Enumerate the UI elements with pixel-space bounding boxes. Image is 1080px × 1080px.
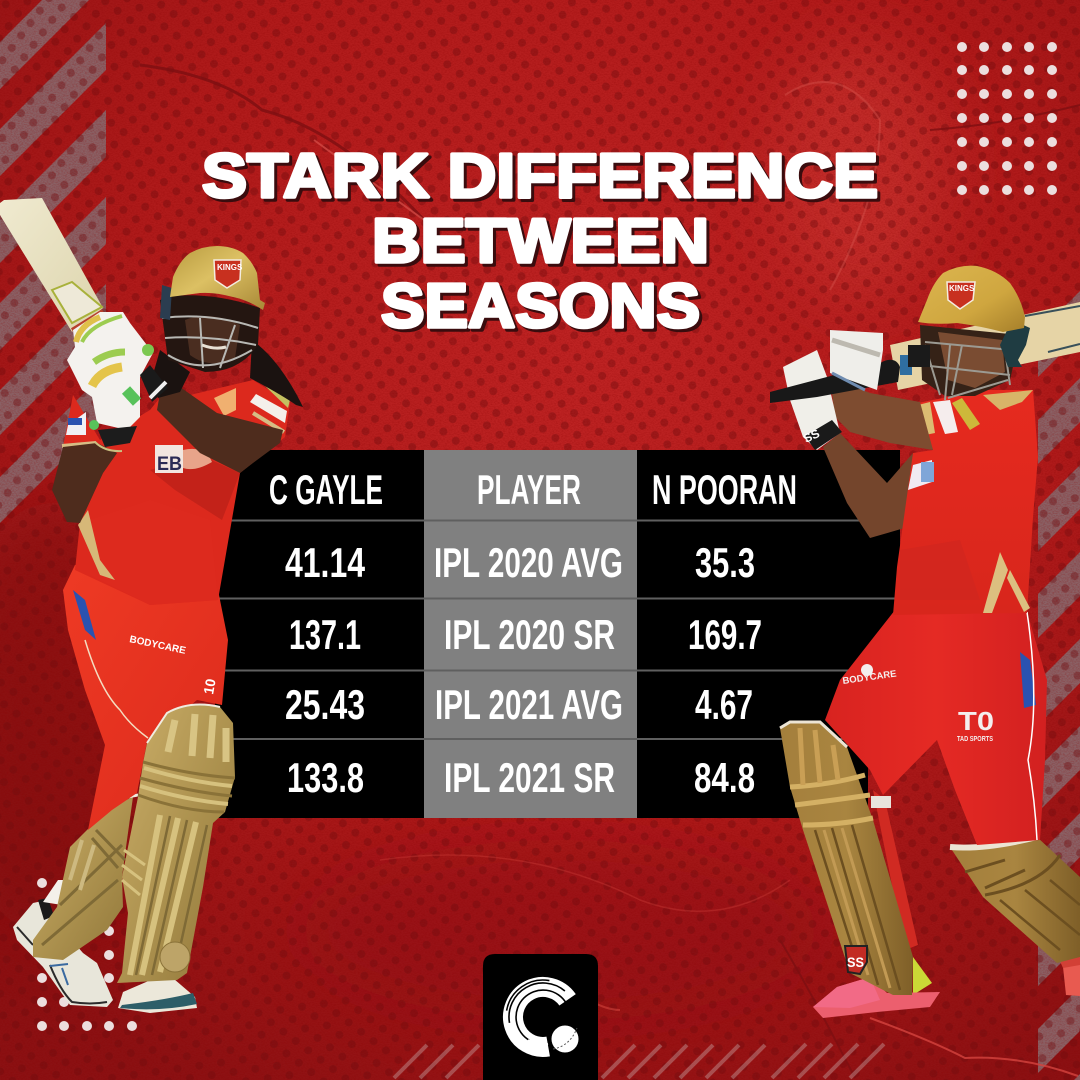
title: STARK DIFFERENCE [205,145,881,214]
pad brand badge: SS [847,954,864,970]
row: IPL 2021 average [285,681,753,728]
comparison table [215,450,900,818]
left player jersey: EB [157,454,182,475]
title: SEASONS [381,272,700,341]
right player helmet: KINGS [949,284,975,293]
right player gloves and handle: SS [801,426,822,446]
right player upper arm [830,377,933,450]
right player shorts [825,610,1047,950]
left player face and grille [160,285,260,372]
shorts logo: T0 [958,706,994,736]
right player bat [890,302,1080,390]
left player gloves [67,312,168,451]
left player shorts: 10 [200,677,219,696]
left player jersey [62,380,291,605]
left player arms [52,387,283,523]
logo black tile [483,954,598,1080]
right player lower arm [823,433,913,538]
row: IPL 2020 average: 35.3 [695,539,755,586]
row: IPL 2020 average: 41.14 [285,539,365,586]
row: IPL 2021 strike rate: IPL 2021 SR [444,754,615,801]
row: IPL 2020 average: IPL 2020 AVG [434,539,623,586]
shorts logo [842,664,994,743]
right diagonal gray stripes [1038,291,1080,1080]
row: IPL 2021 average: 25.43 [285,681,365,728]
jersey sponsor patch [155,445,183,473]
row: IPL 2020 strike rate: 137.1 [289,611,361,658]
helmet badge [947,282,975,309]
row: IPL 2020 strike rate: 169.7 [688,611,762,658]
shorts logo: TAD SPORTS [957,736,993,743]
player left: C Gayle [0,198,303,1013]
header row: C GAYLE [269,466,383,513]
jersey sponsor [908,460,932,490]
table black background [215,450,900,818]
left player helmet: KINGS [217,263,243,272]
right player front pad and shoe [780,722,940,1018]
row: IPL 2021 strike rate [287,754,755,801]
left player hair [152,340,303,407]
left player helmet [170,246,265,310]
title [202,142,881,344]
right player helmet [918,266,1025,332]
row: IPL 2020 strike rate: IPL 2020 SR [444,611,615,658]
row: IPL 2021 strike rate: 84.8 [694,754,755,801]
title: BETWEEN [372,207,709,276]
header row [269,466,797,513]
shorts logo: BODYCARE [842,669,897,687]
helmet badge [214,260,241,288]
right player jersey [893,390,1038,615]
right player back pad and shoe [950,837,1080,996]
row: IPL 2021 average: IPL 2021 AVG [435,681,623,728]
row: IPL 2020 average [285,539,755,586]
header row: PLAYER [477,466,581,513]
dot grid bottom left [37,878,137,1031]
logo C rings and cricket ball [507,980,580,1054]
left player front pad and shoe [117,705,235,1013]
bottom thin diagonal stripes [394,1044,884,1078]
right player face and grille [908,320,1030,400]
title: SEASONS [384,275,703,344]
row: IPL 2021 strike rate: 133.8 [287,754,364,801]
player right: N Pooran [770,266,1080,1018]
logo badge [483,954,598,1080]
title: BETWEEN [375,210,712,279]
table middle gray column [424,450,637,818]
left player back pad and shoe [13,795,138,1007]
right player gloves and handle [770,330,900,450]
row: IPL 2020 strike rate [289,611,762,658]
left player shorts [63,565,228,830]
left player bat [0,198,103,332]
left diagonal gray stripes [0,0,106,523]
header row: N POORAN [652,466,797,513]
dot grid top right [957,42,1057,195]
row: IPL 2021 average: 4.67 [695,681,753,728]
pad brand badge [845,946,867,974]
shorts logo: BODYCARE [128,634,187,657]
title: STARK DIFFERENCE [202,142,878,211]
